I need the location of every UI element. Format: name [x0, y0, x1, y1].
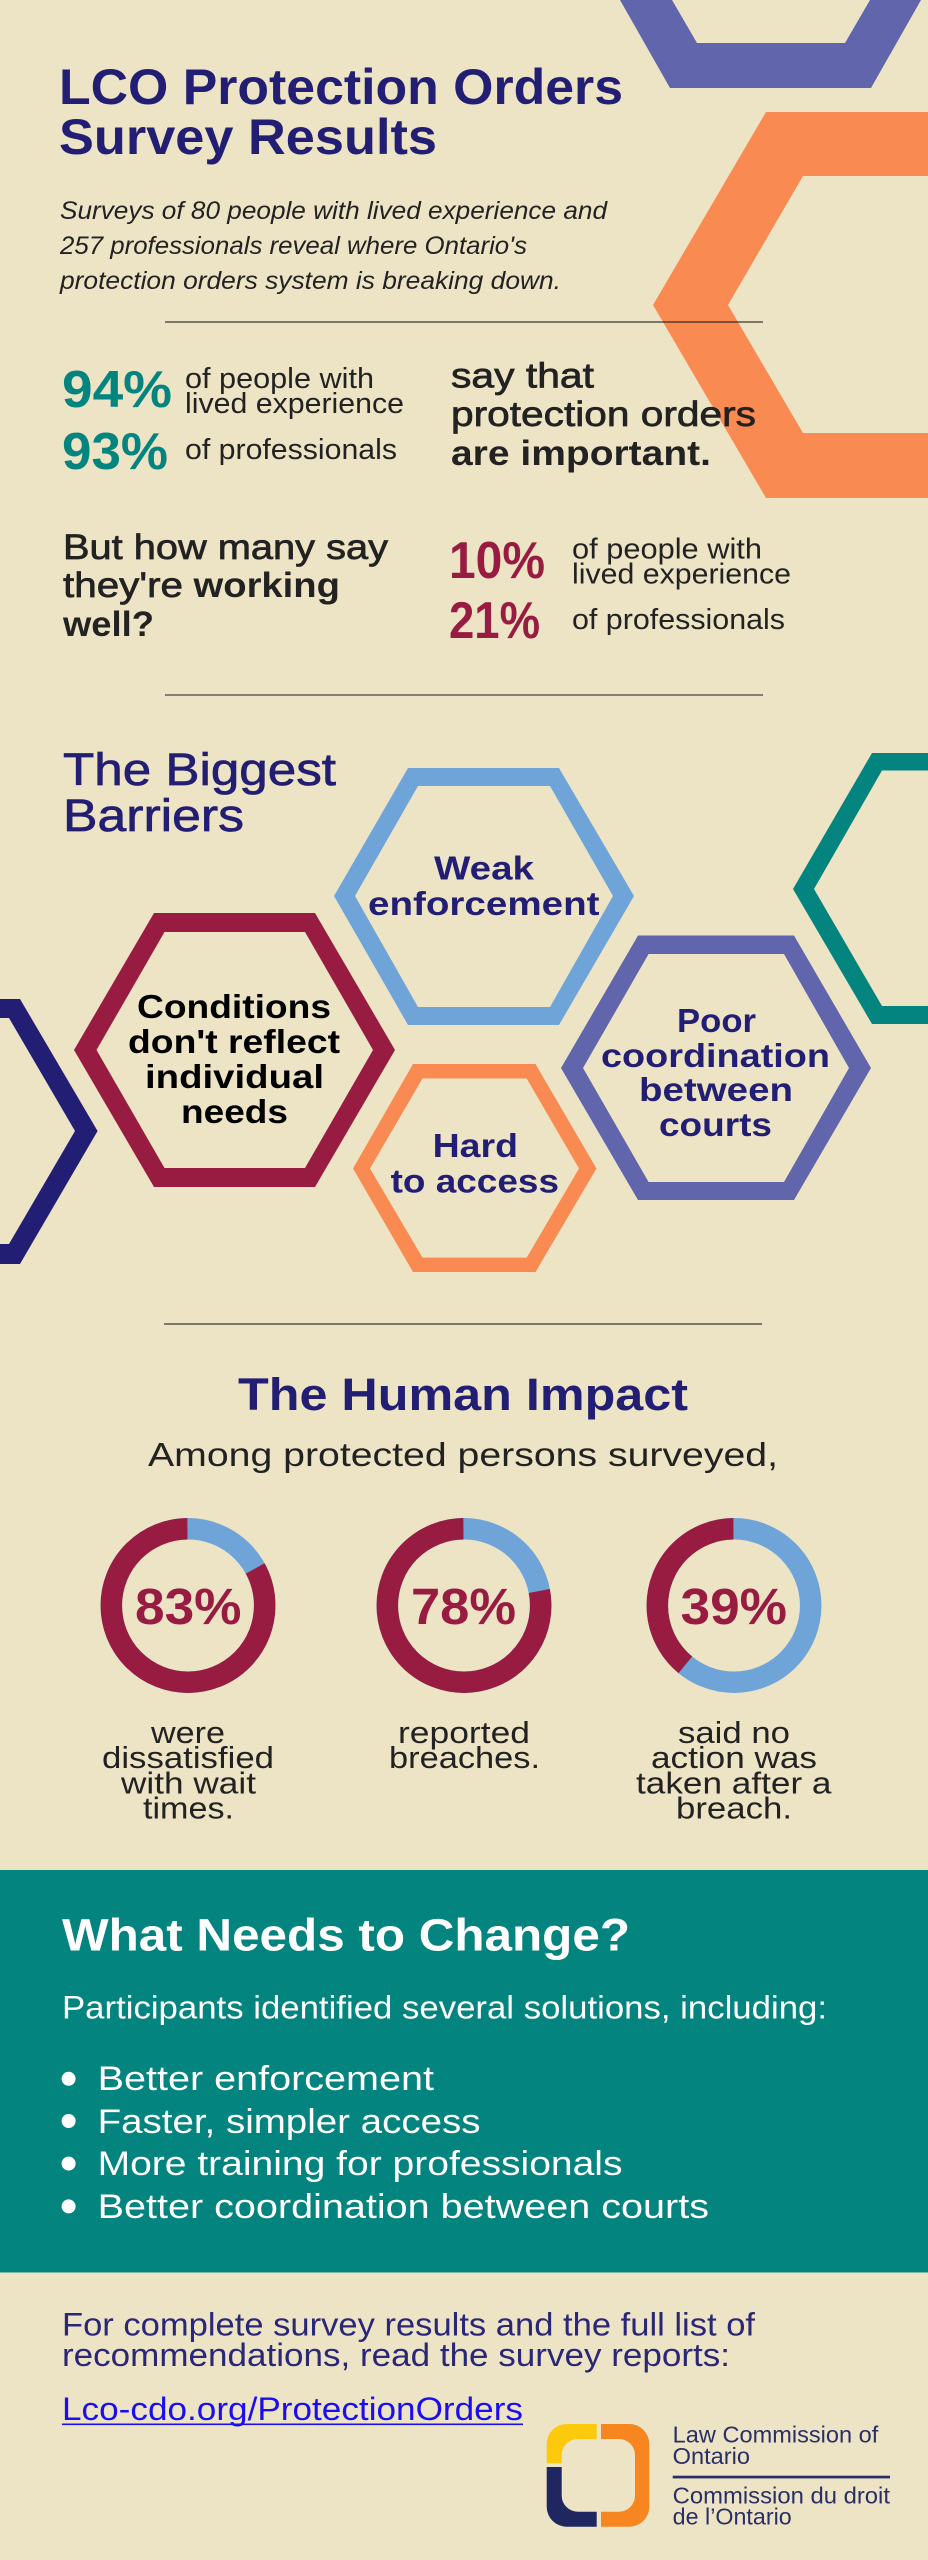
barrier: poor coordination between courts [561, 936, 871, 1200]
heading: the biggest barriers: The Biggest [63, 744, 337, 795]
barrier: hard to access: Hard [433, 1127, 518, 1164]
donut stat: 83% [102, 1529, 274, 1826]
logo wordmark [673, 2422, 891, 2530]
label: people with lived experience: lived experience [185, 388, 404, 420]
panel: what needs to change [0, 1870, 928, 2272]
intro text: protection orders system is breaking down. [59, 267, 561, 295]
question: they're [63, 566, 183, 605]
barrier: hard to access: to access [391, 1162, 559, 1200]
donut stat: 39%: action was [651, 1740, 817, 1775]
barrier: conditions don't reflect individual needs [74, 913, 395, 1187]
decorative hexagon: orange right [653, 112, 928, 498]
question: working [192, 566, 340, 605]
barrier: weak enforcement: Weak [434, 850, 535, 886]
donut stat: 39%: taken after a [636, 1766, 832, 1801]
logo mark [547, 2424, 649, 2527]
logo wordmark: Ontario [673, 2443, 750, 2469]
donut stat: 78%: 78% [411, 1578, 516, 1635]
statement: are important. [451, 434, 711, 473]
barrier: poor coordination between courts: between [639, 1071, 793, 1108]
heading: the biggest barriers: Barriers [63, 790, 244, 841]
intro text [59, 197, 608, 295]
call to action text [62, 2306, 755, 2373]
donut stat: 83%: dissatisfied [102, 1740, 274, 1775]
barrier: poor coordination between courts: courts [659, 1106, 772, 1143]
stat: 21%: 21% [449, 592, 540, 650]
barrier: conditions don't reflect individual needs: needs [181, 1093, 288, 1130]
logo wordmark: Law Commission of [673, 2422, 879, 2448]
logo wordmark: de l’Ontario [673, 2504, 792, 2530]
donut stat: 78%: breaches. [389, 1740, 540, 1775]
question [62, 528, 389, 644]
solutions list: Better coordination between courts [98, 2188, 709, 2226]
donut stat: 83%: with wait [120, 1766, 256, 1801]
solutions list: More training for professionals [98, 2145, 623, 2183]
subheading: Among protected persons surveyed, [148, 1436, 778, 1473]
label: professionals: of professionals [185, 434, 397, 466]
solutions list: Better enforcement [98, 2060, 435, 2098]
donut stat: 39%: said no [678, 1715, 790, 1750]
stat: 10%: 10% [449, 532, 545, 590]
label: people with lived experience: of people with [185, 363, 374, 395]
donut stat: 39% [636, 1529, 832, 1826]
solutions list: Faster, simpler access [98, 2103, 480, 2141]
title [59, 59, 623, 165]
donut stat: 78%: reported [398, 1715, 530, 1750]
title: Survey Results [59, 109, 437, 165]
heading: the biggest barriers [63, 744, 337, 841]
panel heading: What Needs to Change? [62, 1910, 630, 1960]
barrier: weak enforcement [334, 768, 634, 1025]
donut stat: 83%: were [150, 1715, 225, 1750]
intro text: Surveys of 80 people with lived experience and [60, 197, 608, 225]
call to action text: For complete survey results and the full list of [62, 2306, 755, 2342]
question: well? [62, 605, 154, 644]
barrier: conditions don't reflect individual needs: individual [145, 1058, 324, 1095]
barrier: poor coordination between courts: coordination [601, 1037, 830, 1074]
statement [451, 356, 756, 473]
link text: Lco-cdo.org/ProtectionOrders [62, 2391, 523, 2427]
label: people with lived experience: lived experience [572, 558, 791, 590]
label: people with lived experience [185, 363, 404, 420]
donut stat: 78% [387, 1529, 541, 1775]
barrier: conditions don't reflect individual needs: don't reflect [128, 1023, 340, 1060]
barrier: conditions don't reflect individual needs: Conditions [137, 988, 331, 1025]
logo wordmark: Commission du droit [673, 2482, 891, 2508]
barrier: weak enforcement: enforcement [368, 885, 600, 922]
label: professionals: of professionals [572, 604, 785, 636]
question: But how many say [63, 528, 389, 567]
intro text: 257 professionals reveal where Ontario's [59, 232, 527, 260]
donut stat: 83%: 83% [135, 1578, 242, 1635]
call to action text: recommendations, read the survey reports: [62, 2337, 730, 2373]
donut stat: 39%: 39% [680, 1578, 787, 1635]
stat block: protection orders are important [62, 356, 756, 481]
label: people with lived experience [572, 534, 791, 590]
decorative hexagon: purple top right [620, 0, 921, 88]
stat block: working well [62, 528, 791, 650]
donut stat: 39%: breach. [676, 1791, 792, 1826]
panel intro: Participants identified several solutions, including: [62, 1990, 827, 2026]
decorative hexagon: navy left [0, 999, 98, 1264]
statement: say that [451, 356, 594, 396]
solutions list [62, 2060, 709, 2226]
stat: 94%: 94% [62, 361, 172, 419]
barrier: hard to access [353, 1064, 596, 1272]
label: people with lived experience: of people with [572, 534, 762, 566]
title: LCO Protection Orders [59, 59, 623, 115]
donut stat: 83%: times. [143, 1791, 234, 1826]
decorative hexagon: teal right [793, 753, 928, 1024]
statement: protection orders [451, 395, 756, 434]
stat: 93%: 93% [62, 423, 168, 481]
heading: the human impact: The Human Impact [238, 1369, 688, 1420]
barrier: poor coordination between courts: Poor [677, 1002, 756, 1039]
logo: law commission of ontario [547, 2422, 891, 2530]
